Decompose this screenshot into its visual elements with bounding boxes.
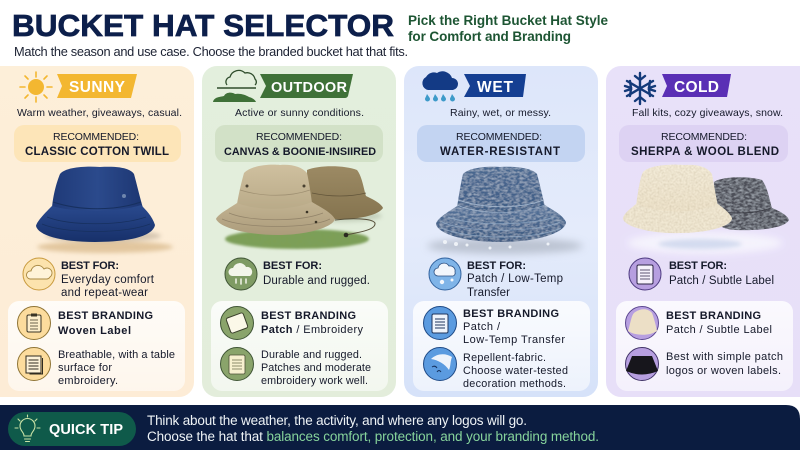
recommended: sunny: CLASSIC COTTON TWILL [25,146,169,158]
banner: cold: COLD [674,79,719,96]
card: wet branding: BEST BRANDING [463,308,559,320]
best for: wet: BEST FOR: [467,260,526,272]
recommended: cold [619,125,788,162]
quick tip pill: QUICK TIP [49,422,123,438]
card: wet branding: Choose water-tested [463,365,568,377]
banner: wet: WET [477,79,514,96]
best for: sunny: Everyday comfort [61,274,155,286]
banner: outdoor: OUTDOOR [271,80,348,96]
recommended: sunny: RECOMMENDED: [53,131,139,143]
icon: cloud badge [429,258,461,290]
recommended: sunny [14,125,181,162]
icon: patch badge [220,306,254,340]
card: outdoor branding [211,301,388,391]
hat: canvas boonie pair [216,165,383,249]
panel: wet [404,66,598,397]
icon: snowflake [625,73,655,104]
quick tip pill [8,412,136,446]
icon: clipboard badge [424,306,456,340]
recommended: outdoor [215,125,383,162]
quick tip text: Think about the weather, the activity, and where any logos will go. [147,413,527,428]
card: sunny branding: surface for [58,362,112,374]
icon: rain cloud badge [225,258,257,290]
card: wet branding: Repellent-fabric. [463,352,546,364]
card: cold branding: logos or woven labels. [666,365,781,377]
hat: navy cotton twill [36,167,173,253]
card: sunny branding: Woven Label [58,325,131,337]
banner: sunny [57,74,137,98]
card: outdoor branding: BEST BRANDING [261,310,356,322]
best for: cold: BEST FOR: [669,260,727,272]
icon: document badge [18,348,50,380]
recommended: cold: SHERPA & WOOL BLEND [631,146,779,158]
icon: sherpa hat badge [626,306,658,340]
best for: sunny: BEST FOR: [61,260,119,272]
hat: denim water-resistant [427,167,583,254]
card: wet branding: decoration methods. [463,378,566,390]
best for: outdoor [225,258,370,290]
best for: wet: Transfer [467,287,510,299]
icon: dark hat badge [626,348,658,380]
caption: cold: Fall kits, cozy giveaways, snow. [632,107,783,119]
banner: outdoor [260,74,353,98]
best for: outdoor: BEST FOR: [263,260,322,272]
panel: outdoor [202,66,396,397]
title: BUCKET HAT SELECTOR [12,8,394,43]
hat: sherpa and wool pair [623,165,789,254]
best for: sunny: and repeat-wear [61,287,148,299]
best for: cold: Patch / Subtle Label [669,275,774,287]
quick tip text: Choose the hat that balances comfort, protection, and your branding method. [147,429,599,444]
tagline [408,13,608,44]
quick tip bar [0,405,800,450]
card: outdoor branding: Durable and rugged. [261,349,362,361]
best for: cold [629,258,774,290]
recommended: outdoor: RECOMMENDED: [256,131,342,143]
icon: cloud badge [23,258,55,290]
best for: sunny [23,258,155,299]
card: cold branding: Patch / Subtle Label [666,324,772,336]
card: sunny branding: BEST BRANDING [58,310,153,322]
banner: wet [464,74,526,97]
tagline: Pick the Right Bucket Hat Style [408,13,608,28]
card: cold branding: Best with simple patch [666,351,783,363]
card: cold branding: BEST BRANDING [666,310,761,322]
card: wet branding [413,301,590,391]
card: wet branding: Patch / [463,321,501,333]
recommended: wet: WATER-RESISTANT [440,146,560,158]
panel: sunny [0,66,194,397]
recommended: outdoor: CANVAS & BOONIE-INSIIRED [224,146,376,158]
icon: rain cloud [422,71,458,102]
card: outdoor branding: Patch / Embroidery [261,324,364,336]
best for: wet [429,258,563,299]
panel: cold [606,66,800,397]
icon: sun [20,72,52,102]
card: sunny branding: Breathable, with a table [58,349,175,361]
card: wet branding: Low-Temp Transfer [463,334,565,346]
card: sunny branding [8,301,185,391]
card: outdoor branding: Patches and moderate [261,362,371,374]
icon: lightbulb [15,415,40,442]
subtitle: Match the season and use case. Choose the branded bucket hat that fits. [14,44,408,59]
caption: outdoor: Active or sunny conditions. [235,107,364,119]
icon: clipboard badge [18,306,50,340]
card: cold branding [616,301,793,391]
best for: outdoor: Durable and rugged. [263,275,370,287]
tagline: for Comfort and Branding [408,29,571,44]
recommended: wet: RECOMMENDED: [456,131,542,143]
icon: water-repellent fabric badge [424,348,456,380]
icon: clipboard badge [629,258,661,290]
caption: wet: Rainy, wet, or messy. [450,107,551,119]
icon: clipboard badge [220,348,254,380]
banner: sunny: SUNNY [69,79,126,96]
icon: cloud and hills [213,70,256,102]
banner: cold [662,74,731,97]
caption: sunny: Warm weather, giveaways, casual. [17,107,182,119]
best for: wet: Patch / Low-Temp [467,273,563,285]
card: sunny branding: embroidery. [58,375,118,387]
card: outdoor branding: embroidery work well. [261,375,368,387]
quick tip text [147,413,599,444]
recommended: wet [417,125,585,162]
recommended: cold: RECOMMENDED: [661,131,747,143]
